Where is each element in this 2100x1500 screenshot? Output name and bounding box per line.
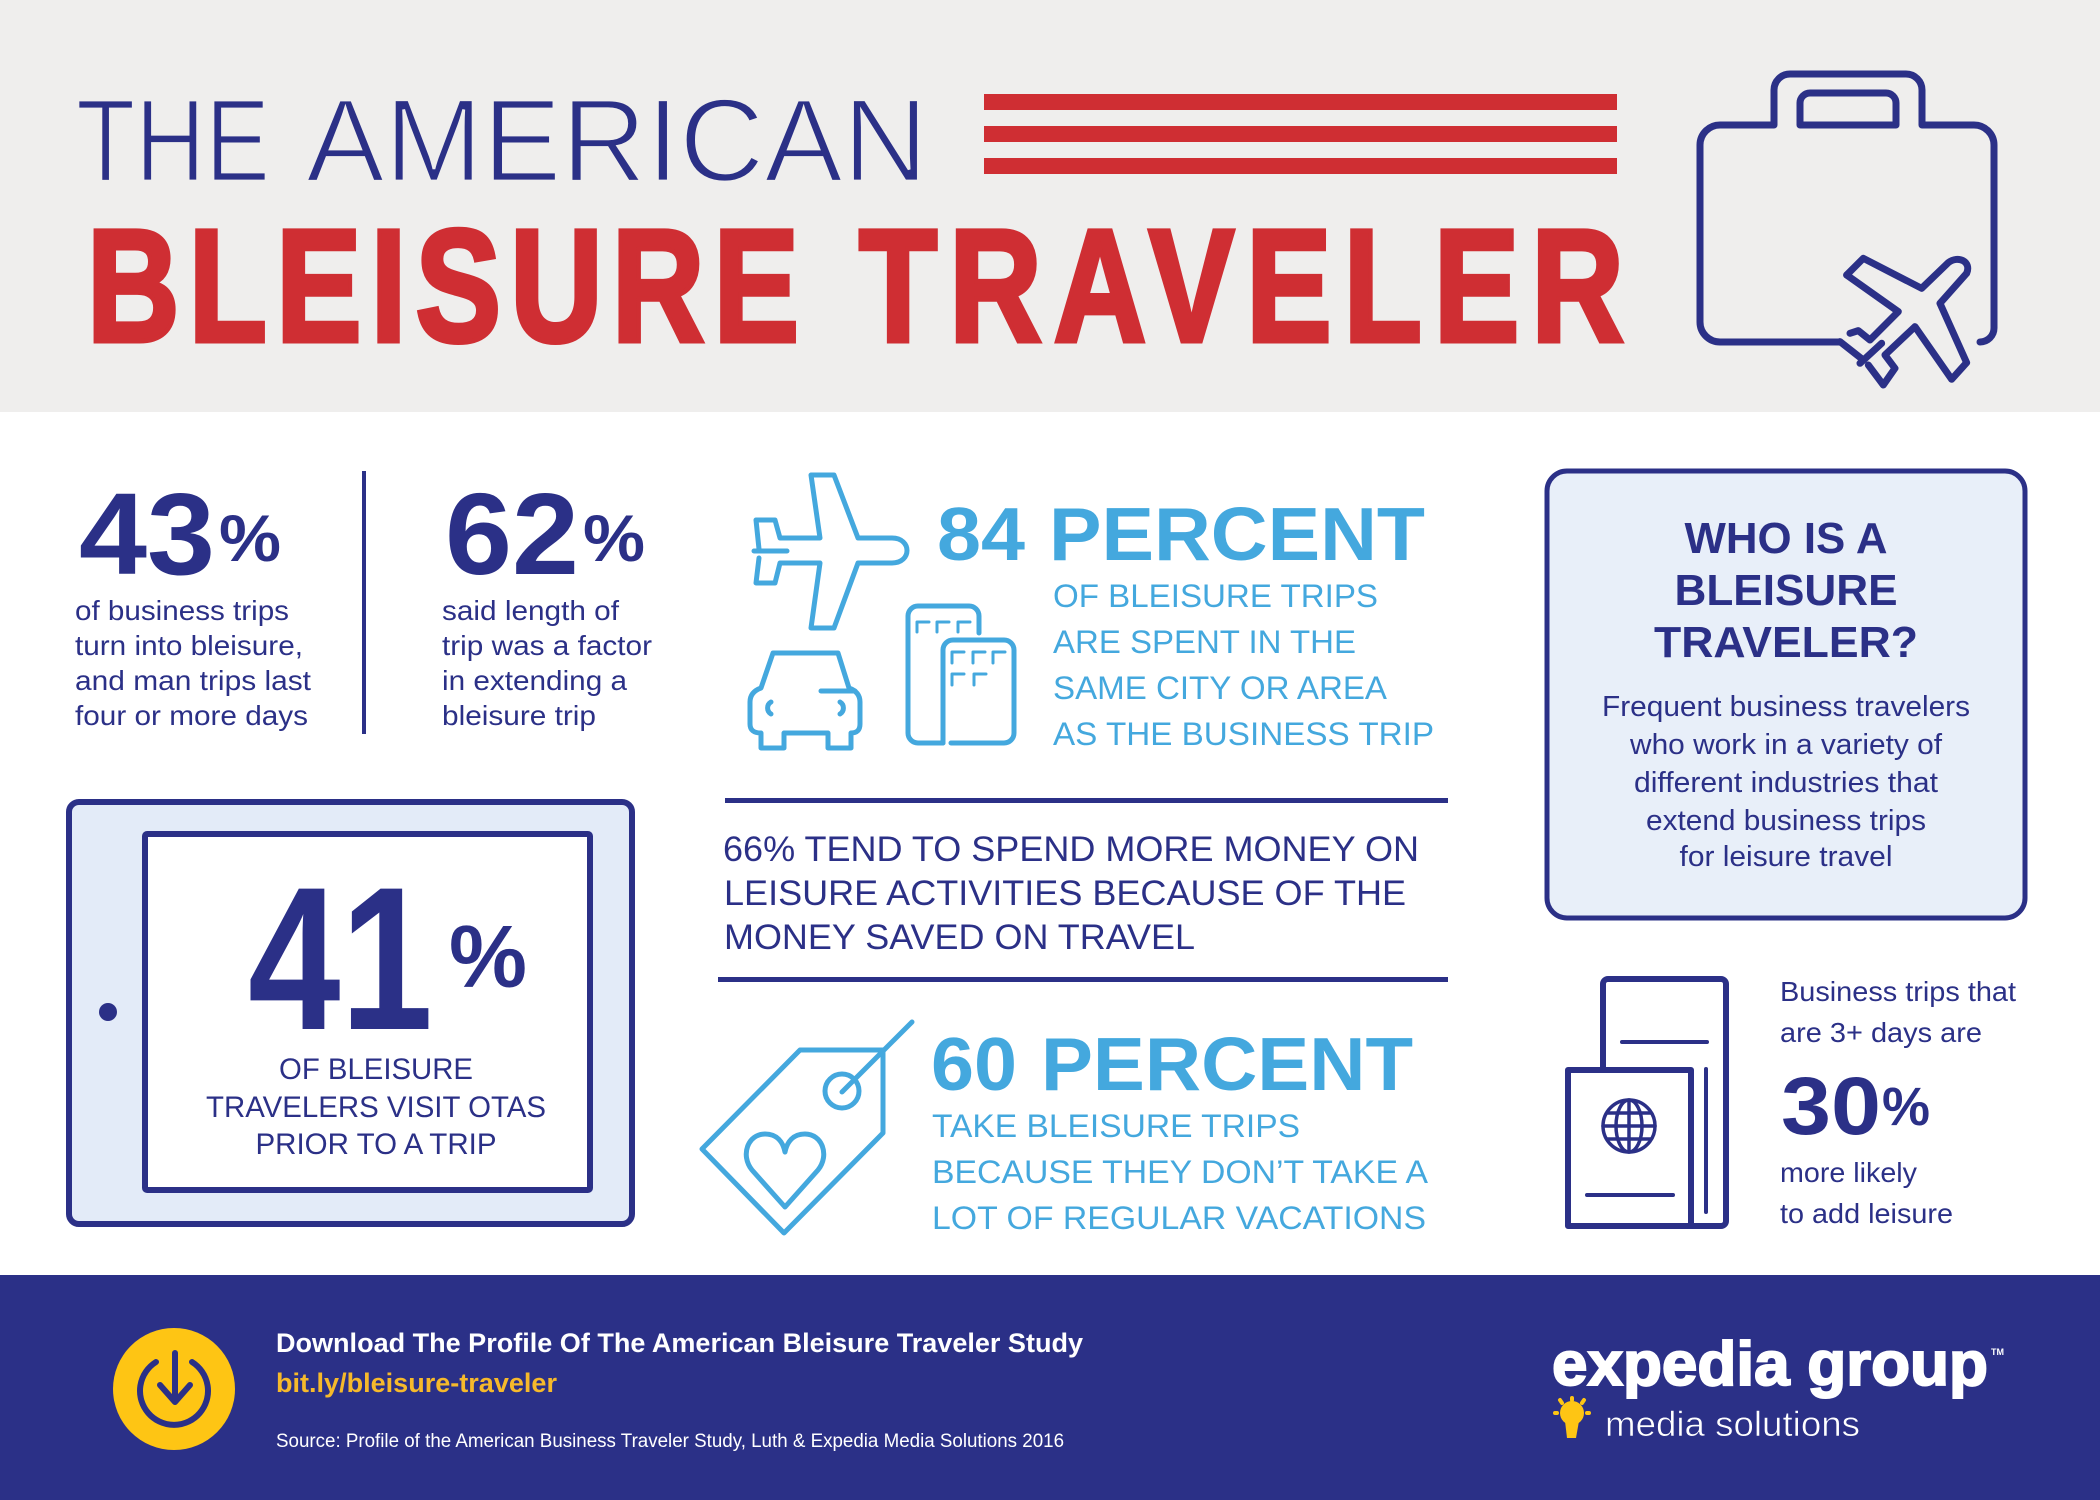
logo: expedia group: media solutions <box>1605 1405 1860 1444</box>
stat: 30 percent more likely: to add leisure <box>1780 1198 1953 1229</box>
icon: car <box>750 653 860 748</box>
stat: 43 percent <box>75 469 311 731</box>
title: the american: THE <box>76 75 270 207</box>
panel heading: BLEISURE <box>1674 566 1898 615</box>
60 percent description: TAKE BLEISURE TRIPS <box>932 1108 1300 1144</box>
panel heading: WHO IS A <box>1684 514 1888 563</box>
text block: 66 percent <box>723 830 1419 957</box>
stat: 62 percent: bleisure trip <box>442 700 596 731</box>
stat: 62 percent <box>442 469 652 731</box>
stat: 30 percent more likely: % <box>1882 1077 1930 1137</box>
stat: 43 percent: of business trips <box>75 595 289 626</box>
stat: 60 percent: PERCENT <box>1041 1022 1413 1106</box>
logo: expedia group <box>1552 1330 2004 1444</box>
icon: city buildings <box>908 606 1014 743</box>
84 percent description: AS THE BUSINESS TRIP <box>1053 716 1434 752</box>
icon: passport and ticket <box>1568 979 1726 1226</box>
percent sign: % <box>449 907 527 1006</box>
panel body text: different industries that <box>1634 767 1938 799</box>
panel body text: Frequent business travelers <box>1602 691 1970 723</box>
icon: airplane <box>754 475 907 628</box>
title: bleisure traveler: TRAVELER <box>859 196 1624 375</box>
stat: 43 percent: 43 <box>79 469 215 599</box>
title: the american: AMERICAN <box>306 75 928 207</box>
panel body text <box>1602 691 1970 873</box>
stat: 60 percent: 60 <box>931 1022 1017 1106</box>
panel heading <box>1654 514 1918 667</box>
panel body text: extend business trips <box>1646 805 1926 837</box>
icon: suitcase with plane <box>1700 74 1994 385</box>
panel body text: for leisure travel <box>1680 841 1892 873</box>
panel body text: who work in a variety of <box>1629 729 1943 761</box>
big number 41: 41 <box>248 845 433 1073</box>
download heading: Download The Profile Of The American Bleisure Traveler Study <box>276 1328 1083 1358</box>
stat: 43 percent: four or more days <box>75 700 308 731</box>
panel: who is a bleisure traveler <box>1547 471 2025 918</box>
icon: download circle <box>113 1328 235 1450</box>
stat: 43 percent: % <box>219 501 281 575</box>
stat: 30 percent more likely: 30 <box>1781 1061 1881 1152</box>
text block: 66 percent: MONEY SAVED ON TRAVEL <box>724 918 1195 957</box>
84 percent description: OF BLEISURE TRIPS <box>1053 578 1378 614</box>
stat: 62 percent: % <box>583 501 645 575</box>
download link: bit.ly/bleisure-traveler <box>276 1368 557 1398</box>
text block: 66 percent: LEISURE ACTIVITIES BECAUSE OF THE <box>724 874 1406 913</box>
stat: 62 percent: 62 <box>445 469 579 599</box>
stat: 30 percent more likely: are 3+ days are <box>1780 1017 1982 1048</box>
stat: 30 percent more likely: more likely <box>1780 1157 1917 1188</box>
logo: expedia group: TM <box>1991 1347 2004 1357</box>
stat: 62 percent: in extending a <box>442 665 627 696</box>
stat: 43 percent: turn into bleisure, <box>75 630 303 661</box>
stat: 84 percent: PERCENT <box>1049 492 1425 576</box>
source note: Source: Profile of the American Business Traveler Study, Luth & Expedia Media Solutions 2016 <box>276 1431 1064 1452</box>
text block: 66 percent: 66% TEND TO SPEND MORE MONEY ON <box>723 830 1419 869</box>
icon: price tag with heart <box>702 1022 912 1233</box>
stat: 30 percent more likely <box>1780 976 2016 1229</box>
tablet caption: PRIOR TO A TRIP <box>256 1128 496 1161</box>
tablet caption: OF BLEISURE <box>279 1053 473 1086</box>
footer panel <box>0 1275 2100 1500</box>
84 percent description <box>1053 578 1434 752</box>
stat: 84 percent: 84 <box>937 492 1025 576</box>
title: bleisure traveler: BLEISURE <box>87 196 799 375</box>
red flag stripes <box>984 94 1617 174</box>
tablet caption <box>206 1053 546 1161</box>
stat: 43 percent: and man trips last <box>75 665 311 696</box>
84 percent description: SAME CITY OR AREA <box>1053 670 1388 706</box>
stat: 60 percent <box>931 1022 1429 1236</box>
stat: 62 percent: trip was a factor <box>442 630 652 661</box>
logo: expedia group: expedia group <box>1552 1330 1988 1399</box>
header panel <box>0 0 2100 412</box>
panel: tablet with 41 percent <box>69 802 632 1224</box>
stat: 84 percent <box>937 492 1434 752</box>
60 percent description: LOT OF REGULAR VACATIONS <box>932 1200 1426 1236</box>
stat: 30 percent more likely: Business trips that <box>1780 976 2016 1007</box>
60 percent description: BECAUSE THEY DON’T TAKE A <box>932 1154 1429 1190</box>
84 percent description: ARE SPENT IN THE <box>1053 624 1356 660</box>
panel heading: TRAVELER? <box>1654 618 1918 667</box>
60 percent description <box>932 1108 1429 1236</box>
stat: 62 percent: said length of <box>442 595 619 626</box>
title: bleisure traveler <box>87 196 1624 375</box>
tablet caption: TRAVELERS VISIT OTAS <box>206 1091 546 1124</box>
icon: light bulb <box>1555 1398 1589 1438</box>
